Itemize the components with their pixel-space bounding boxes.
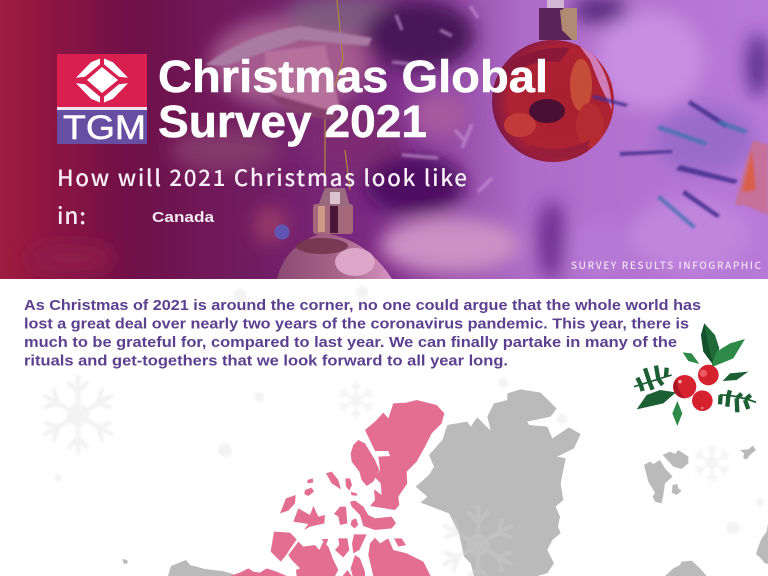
intro paragraph: much to be grateful for, compared to last year. We can finally partake in many of the	[24, 334, 677, 351]
logo emblem diamond	[76, 58, 128, 102]
subtitle: in:	[57, 199, 86, 231]
map: gray landmasses	[122, 389, 768, 576]
Svalbard and Arctic islands	[644, 446, 768, 576]
header photo banner	[0, 0, 768, 280]
logo: TGM	[57, 54, 147, 147]
title	[158, 51, 548, 147]
marker dot	[274, 224, 290, 240]
decorative snowflake background	[45, 286, 764, 576]
subtitle	[57, 161, 467, 231]
Greenland	[416, 389, 581, 576]
title: Survey 2021	[158, 96, 427, 147]
title: Christmas Global	[158, 51, 548, 102]
ornament: red bauble	[492, 40, 614, 162]
intro paragraph	[24, 297, 701, 370]
ornament: bauble cap	[539, 0, 577, 40]
intro paragraph: rituals and get-togethers that we look forward to all year long.	[24, 352, 508, 370]
intro paragraph: lost a great deal over nearly two years of the coronavirus pandemic. This year, there is	[24, 316, 689, 332]
header tag line: SURVEY RESULTS INFOGRAPHIC	[571, 257, 762, 272]
snowflake over Greenland	[445, 507, 511, 576]
intro paragraph: As Christmas of 2021 is around the corner, no one could argue that the whole world has	[24, 297, 701, 314]
Alaska	[122, 559, 234, 576]
icon: holly and berries	[634, 323, 756, 426]
ornament: gold bauble	[277, 0, 392, 279]
country label: Canada	[152, 209, 215, 226]
ribbon and tinsel	[205, 6, 768, 229]
logo: TGM: TGM	[63, 109, 146, 147]
subtitle: How will 2021 Christmas look like	[57, 161, 467, 193]
map: Canada highlighted in pink	[230, 400, 444, 576]
